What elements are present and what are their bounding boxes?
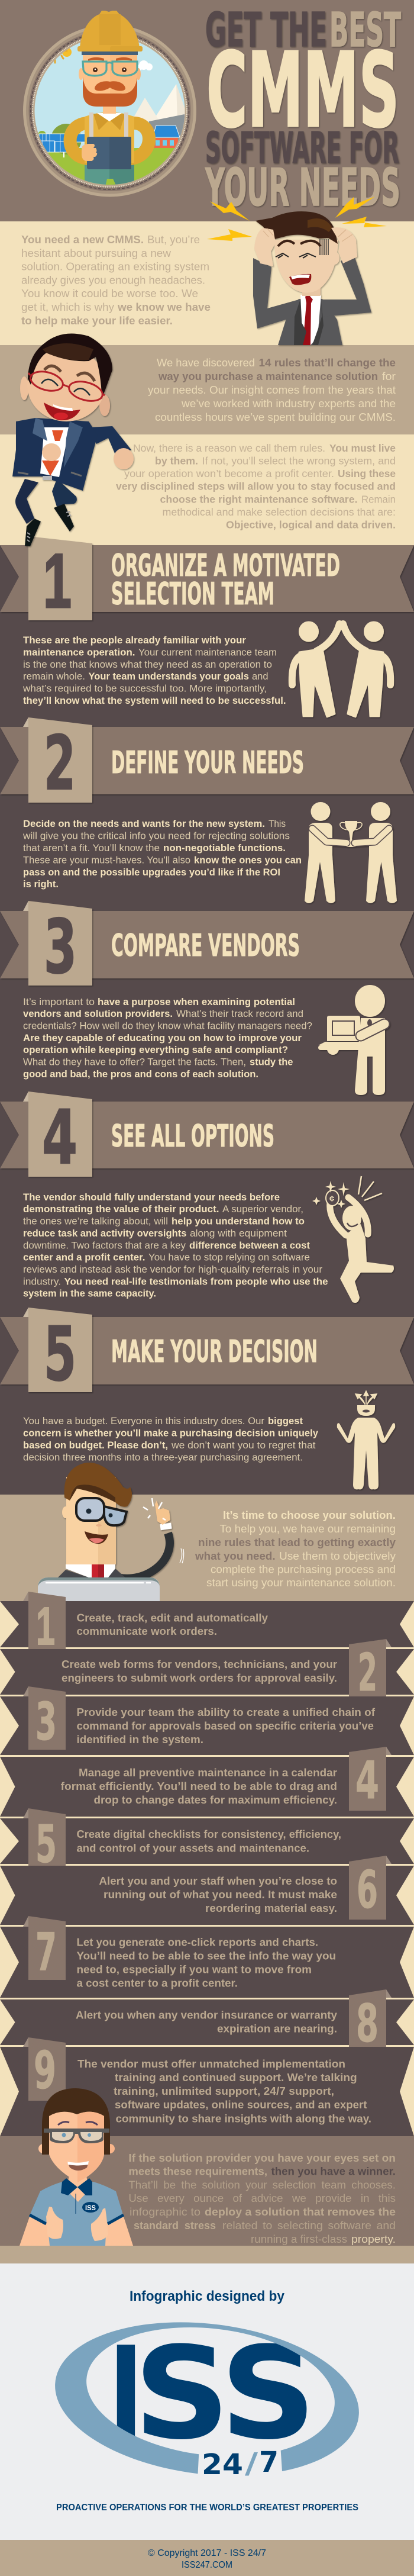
text block: step 3 description: credentials? How well do they know what facility managers need? <box>23 1020 312 1031</box>
text block: step 4 description: You need real-life testimonials from people who use the <box>64 1276 328 1287</box>
rule tab 7 <box>23 1916 66 1982</box>
panel: five steps dark background <box>0 545 414 1495</box>
text block: you have a winner: That’ll be the solution your selection team chooses. <box>128 2178 396 2191</box>
rule tab 3 <box>23 1686 66 1752</box>
icon: smiling man in polo with thumbs up: ISS <box>85 2204 96 2212</box>
text block: step 1 description: maintenance operation. <box>23 648 135 658</box>
panel: credits light background <box>0 2263 414 2540</box>
text block: you have a winner <box>128 2152 396 2245</box>
rule text 7: need to, especially if you want to move from <box>77 1964 312 1976</box>
logo: ISS 24/7: S <box>220 2319 316 2468</box>
text block: step 3 description: Are they capable of educating you on how to improve your <box>23 1033 302 1044</box>
rule tab 9: 9 <box>34 2040 56 2101</box>
rule tab 5 <box>23 1808 66 1875</box>
copyright <box>148 2548 266 2570</box>
text block: step 2 description: that aren’t a fit. You’ll know the <box>23 843 160 854</box>
text block: step 2 description: Decide on the needs and wants for the new system. <box>23 819 265 829</box>
text block: you need a new CMMS <box>21 233 211 327</box>
heading: organize a motivated selection team <box>111 548 340 612</box>
rule text 8: Alert you when any vendor insurance or warranty <box>76 2009 337 2021</box>
number tab 2: 2 <box>44 720 76 807</box>
text block: why they are rules: choose the right maintenance software. <box>160 494 357 505</box>
text block: time to choose: To help you, we have our remaining <box>220 1522 396 1535</box>
text block: step 2 description: will give you the critical info you need for rejecting solutions <box>22 831 290 842</box>
panel: copyright footer background <box>0 2540 414 2576</box>
text block: step 1 description: and <box>252 671 269 682</box>
rule text 9: training and continued support. We’re talking <box>115 2072 357 2084</box>
text block: you need a new CMMS: hesitant about pursuing a new <box>21 247 172 259</box>
text block: you have a winner: property. <box>351 2233 396 2245</box>
text block: step 4 description: help you understand how to <box>172 1216 305 1226</box>
text block: why they are rules: Now, there is a reason we call them rules. <box>133 442 325 454</box>
text block: step 3 description: What do they have to offer? Target the facts. Then, <box>23 1057 246 1068</box>
rule text 9: community to share insights with along the way. <box>116 2113 371 2125</box>
rule tab 1 <box>23 1592 66 1656</box>
panel: choose solution tan background <box>0 1495 414 1601</box>
text block: discovered 14 rules: 14 rules that’ll change the <box>259 356 396 369</box>
rule 8 <box>0 1989 414 2054</box>
ribbon 3 <box>0 901 414 990</box>
text block: time to choose: complete the purchasing process and <box>211 1563 396 1576</box>
rule text 9: The vendor must offer unmatched implementation <box>77 2058 345 2070</box>
text block: you have a winner: running a first-class <box>251 2233 347 2245</box>
text block: step 1 description: remain whole. <box>23 671 85 682</box>
text block: you need a new CMMS: to help make your life easier. <box>21 314 173 327</box>
text block: step 5 description: biggest <box>268 1416 303 1427</box>
ribbon 2 <box>0 717 414 807</box>
text block: step 2 description: know the ones you can <box>194 855 302 865</box>
rule 4 <box>0 1747 414 1817</box>
text block: step 4 description: reviews and instead ask the vendor for high-quality referrals in your <box>23 1264 323 1275</box>
text block: step 1 description: Your team understands your goals <box>89 671 249 682</box>
text block: step 2 description <box>22 819 302 890</box>
rule text 8: expiration are nearing. <box>217 2023 337 2035</box>
rule 1 <box>0 1592 414 1656</box>
icon: confused person with arrows <box>337 1391 395 1489</box>
text block: time to choose: nine rules that lead to getting exactly <box>198 1536 396 1548</box>
rule text 6: Alert you and your staff when you’re close to <box>99 1875 337 1887</box>
text block: step 3 description: study the <box>250 1057 293 1068</box>
text block: you have a winner: meets these requirements, <box>128 2165 267 2177</box>
rule text 2 <box>62 1659 337 1684</box>
number tab 5: 5 <box>44 1310 76 1398</box>
rule text 7: Let you generate one-click reports and charts. <box>77 1937 318 1949</box>
text block: why they are rules: Using these <box>338 468 396 479</box>
heading: organize a motivated selection team: SELECTION TEAM <box>111 577 274 612</box>
text block: why they are rules: methodical and make selection decisions that are: <box>162 506 396 518</box>
text block: step 2 description: is right. <box>23 879 59 890</box>
text block: step 4 description: industry. <box>23 1276 61 1287</box>
text block: discovered 14 rules: We have discovered <box>157 356 255 369</box>
rule text 8 <box>76 2009 337 2035</box>
rule text 1: Create, track, edit and automatically <box>77 1612 268 1624</box>
text block: step 4 description: The vendor should fully understand your needs before <box>23 1192 280 1203</box>
text block: you need a new CMMS: we know we have <box>117 301 211 313</box>
rule text 9 <box>77 2058 371 2125</box>
title <box>205 3 401 218</box>
text block: you need a new CMMS: solution. Operating an existing system <box>21 260 209 272</box>
heading: see all options: SEE ALL OPTIONS <box>111 1119 274 1154</box>
text block: you have a winner: deploy a solution that removes the <box>205 2205 396 2218</box>
text block: step 4 description <box>23 1192 328 1299</box>
rule tab 5: 5 <box>35 1814 57 1875</box>
rule text 5 <box>77 1828 341 1854</box>
panel: header background <box>0 0 414 221</box>
text block: discovered 14 rules: we’ve worked with industry experts and the <box>181 397 396 410</box>
rule text 5: Create digital checklists for consistency, efficiency, <box>77 1828 341 1840</box>
text block: you need a new CMMS: already gives you enough headaches. <box>21 273 205 286</box>
rule text 1 <box>77 1612 268 1637</box>
logo: ISS 24/7 <box>55 2319 359 2481</box>
rule tab 7: 7 <box>35 1922 57 1982</box>
ribbon 5 <box>0 1308 414 1398</box>
number tab 3 <box>23 901 92 990</box>
icon: celebrating person with coin: ¢ <box>329 1194 334 1204</box>
rule 2 <box>0 1639 414 1703</box>
number tab 1 <box>28 536 92 624</box>
logo: ISS 24/7: S <box>134 2319 230 2468</box>
text block: step 4 description: You have to stop relying on software <box>148 1252 310 1263</box>
icon: two people high five <box>292 622 390 717</box>
text block: step 4 description: system in the same capacity. <box>23 1288 156 1299</box>
text block: you need a new CMMS: You know it could be worse too. We <box>21 287 198 300</box>
panel: discovered rules tan background <box>0 345 414 434</box>
rule text 4: Manage all preventive maintenance in a calendar <box>79 1767 337 1779</box>
text block: discovered 14 rules: countless hours we’ve spent building our CMMS. <box>155 411 396 423</box>
rule tab 6: 6 <box>357 1860 378 1920</box>
logo: ISS 24/7: 7 <box>259 2446 279 2479</box>
icon: celebrating person with coin <box>312 1176 394 1303</box>
text: infographic designed by: Infographic designed by <box>130 2288 285 2304</box>
text block: discovered 14 rules: your needs. Our insight comes from the years that <box>148 384 396 396</box>
text block: you have a winner: infographic to <box>130 2205 200 2218</box>
ribbon 4 <box>0 1091 414 1181</box>
rule text 4: drop to change dates for maximum efficiency. <box>93 1794 337 1806</box>
text block: discovered 14 rules: for <box>382 370 396 382</box>
ribbon 1 <box>0 536 414 624</box>
text block: time to choose: It’s time to choose your solution. <box>223 1509 396 1521</box>
number tab 2 <box>23 717 92 807</box>
rule text 7: You’ll need to be able to see the info the way you <box>77 1950 336 1962</box>
icon: medallion with engineer <box>25 11 195 195</box>
text block: step 4 description: A superior vendor, <box>222 1204 303 1215</box>
text block: you need a new CMMS: But, you’re <box>147 233 200 246</box>
rule 7 <box>0 1916 414 1998</box>
text block: why they are rules: very disciplined steps will allow you to stay focused and <box>116 481 396 492</box>
text block: step 4 description: difference between a cost <box>189 1241 310 1251</box>
rule text 7 <box>77 1937 336 1989</box>
text block: you need a new CMMS: get it, which is why <box>21 301 115 313</box>
rule text 1: communicate work orders. <box>77 1625 217 1637</box>
text block: why they are rules: Remain <box>361 494 396 505</box>
tagline: PROACTIVE OPERATIONS FOR THE WORLD’S GREATEST PROPERTIES <box>56 2503 358 2513</box>
icon: smiling man in polo with thumbs up <box>20 2088 133 2246</box>
logo: ISS 24/7: 24 <box>202 2448 243 2481</box>
icon: stressed businessman with lightning bolts <box>207 197 387 345</box>
text block: step 2 description: pass on and the possible upgrades you’d like if the ROI <box>23 867 280 878</box>
text block: time to choose: what you need. <box>195 1550 276 1562</box>
text block: step 5 description <box>23 1416 319 1463</box>
text block: you have a winner: then you have a winner. <box>271 2165 396 2177</box>
copyright: ISS247.COM <box>182 2560 232 2570</box>
text block: time to choose: start using your maintenance solution. <box>206 1576 396 1589</box>
number tab 4: 4 <box>42 1094 77 1181</box>
panel: intro cream background <box>0 221 414 345</box>
copyright: © Copyright 2017 - ISS 24/7 <box>148 2548 266 2558</box>
rule text 5: and control of your assets and maintenance. <box>77 1842 309 1854</box>
rule text 3: Provide your team the ability to create a unified chain of <box>77 1706 376 1718</box>
number tab 3: 3 <box>44 903 77 990</box>
rule tab 8: 8 <box>356 1994 379 2054</box>
panel: rules explanation cream background <box>0 434 414 545</box>
text block: step 3 description: good and bad, the pros and cons of each solution. <box>23 1069 258 1080</box>
text block: step 3 description: What’s their track record and <box>176 1009 303 1019</box>
icon: person with laptop <box>318 985 385 1095</box>
text block: discovered 14 rules: way you purchase a maintenance solution <box>158 370 378 382</box>
text block: you have a winner: standard stress <box>134 2219 216 2232</box>
rule 9 <box>0 2037 414 2136</box>
rule text 7: a cost center to a profit center. <box>77 1977 238 1989</box>
text block: step 5 description: concern is whether you’ll make a purchasing decision uniquely <box>23 1428 319 1438</box>
rule text 6: reordering material easy. <box>205 1902 337 1914</box>
text block: why they are rules: your operation won’t become a profit center. <box>124 468 334 479</box>
panel: winner brown background <box>0 2136 414 2246</box>
text block: step 4 description: reduce task and activity oversights <box>23 1228 187 1239</box>
rule text 3: identified in the system. <box>77 1734 203 1746</box>
text block: why they are rules <box>116 442 396 530</box>
rule text 4 <box>61 1767 337 1806</box>
icon: jumping happy businessman <box>12 334 134 546</box>
rule tab 4: 4 <box>355 1750 379 1811</box>
text block: step 3 description: have a purpose when examining potential <box>98 997 295 1007</box>
text block: step 2 description: This <box>269 819 286 829</box>
text block: step 1 description: what’s required to be successful too. More importantly, <box>22 683 267 694</box>
rule text 9: training, unlimited support, 24/7 support, <box>114 2085 334 2097</box>
text block: step 1 description: Your current maintenance team <box>138 648 277 658</box>
rule 5 <box>0 1808 414 1875</box>
rule 3 <box>0 1686 414 1755</box>
text block: step 5 description: You have a budget. Everyone in this industry does. Our <box>23 1416 265 1427</box>
text block: you have a winner: related to selecting software and <box>222 2219 396 2232</box>
rule tab 1: 1 <box>36 1597 55 1656</box>
text block: step 4 description: downtime. Two factors that are a key <box>23 1241 186 1251</box>
rule text 3: command for approvals based on specific criteria you’ve <box>77 1720 374 1732</box>
number tab 4 <box>23 1091 92 1181</box>
rule text 3 <box>77 1706 376 1746</box>
logo: ISS 24/7: / <box>245 2447 258 2480</box>
text block: step 1 description <box>22 635 286 706</box>
text block: why they are rules: If not, you’ll select the wrong system, and <box>202 455 396 466</box>
text block: time to choose: Use them to objectively <box>279 1550 396 1562</box>
logo: ISS 24/7: I <box>108 2319 144 2468</box>
number tab 1: 1 <box>43 537 72 624</box>
rule 6 <box>0 1856 414 1925</box>
text block: step 2 description: These are your must-haves. You’ll also <box>23 855 190 865</box>
rule text 6 <box>99 1875 337 1914</box>
text block: step 1 description: is the one that knows what they need as an operation to <box>23 659 272 670</box>
text block: step 3 description: It’s important to <box>23 997 95 1007</box>
text block: step 5 description: we don’t want you to regret that <box>171 1440 316 1451</box>
icon: businessman behind monitor pointing up <box>38 1463 184 1601</box>
text block: why they are rules: by them. <box>155 455 198 466</box>
text block: step 4 description: the ones we’re talking about, will <box>23 1216 168 1226</box>
text block: step 4 description: center and a profit center. <box>23 1252 145 1263</box>
text block: you have a winner: If the solution provider you have your eyes set on <box>128 2152 396 2164</box>
rule tab 2: 2 <box>358 1643 377 1703</box>
text block: step 3 description <box>23 997 312 1080</box>
rule text 2: engineers to submit work orders for approval easily. <box>62 1672 337 1684</box>
text block: step 5 description: decision three months into a three-year purchasing agreement. <box>23 1453 303 1463</box>
text block: step 3 description: operation while keeping everything safe and compliant? <box>23 1045 288 1055</box>
rule text 9: software updates, online sources, and an expert <box>115 2099 367 2111</box>
text block: step 3 description: vendors and solution providers. <box>23 1009 173 1019</box>
panel: nine rules cream background <box>0 1601 414 2136</box>
text block: step 4 description: demonstrating the value of their product. <box>23 1204 219 1215</box>
rule text 4: format efficiently. You’ll need to be able to drag and <box>61 1780 337 1792</box>
text block: why they are rules: You must live <box>329 442 396 454</box>
text block: step 2 description: non-negotiable functions. <box>163 843 286 854</box>
text block: step 4 description: along with equipment <box>190 1228 287 1239</box>
text block: time to choose <box>195 1509 396 1589</box>
rule tab 3: 3 <box>35 1692 57 1752</box>
text block: discovered 14 rules <box>148 356 396 423</box>
text block: you have a winner: Use every ounce of advice we provide in this <box>128 2192 396 2204</box>
icon: two people holding trophy <box>305 802 397 903</box>
panel: tan divider <box>0 2246 414 2263</box>
rule tab 9 <box>23 2037 66 2101</box>
rule text 2: Create web forms for vendors, technicians, and your <box>62 1659 337 1670</box>
rule text 6: running out of what you need. It must make <box>104 1889 337 1901</box>
text block: you need a new CMMS: You need a new CMMS. <box>21 233 144 246</box>
text block: why they are rules: Objective, logical and data driven. <box>226 519 396 530</box>
text block: step 1 description: they’ll know what the system will need to be successful. <box>23 695 286 706</box>
number tab 5 <box>23 1308 92 1398</box>
text block: step 5 description: based on budget. Please don’t, <box>23 1440 168 1451</box>
text block: step 1 description: These are the people already familiar with your <box>23 635 247 646</box>
